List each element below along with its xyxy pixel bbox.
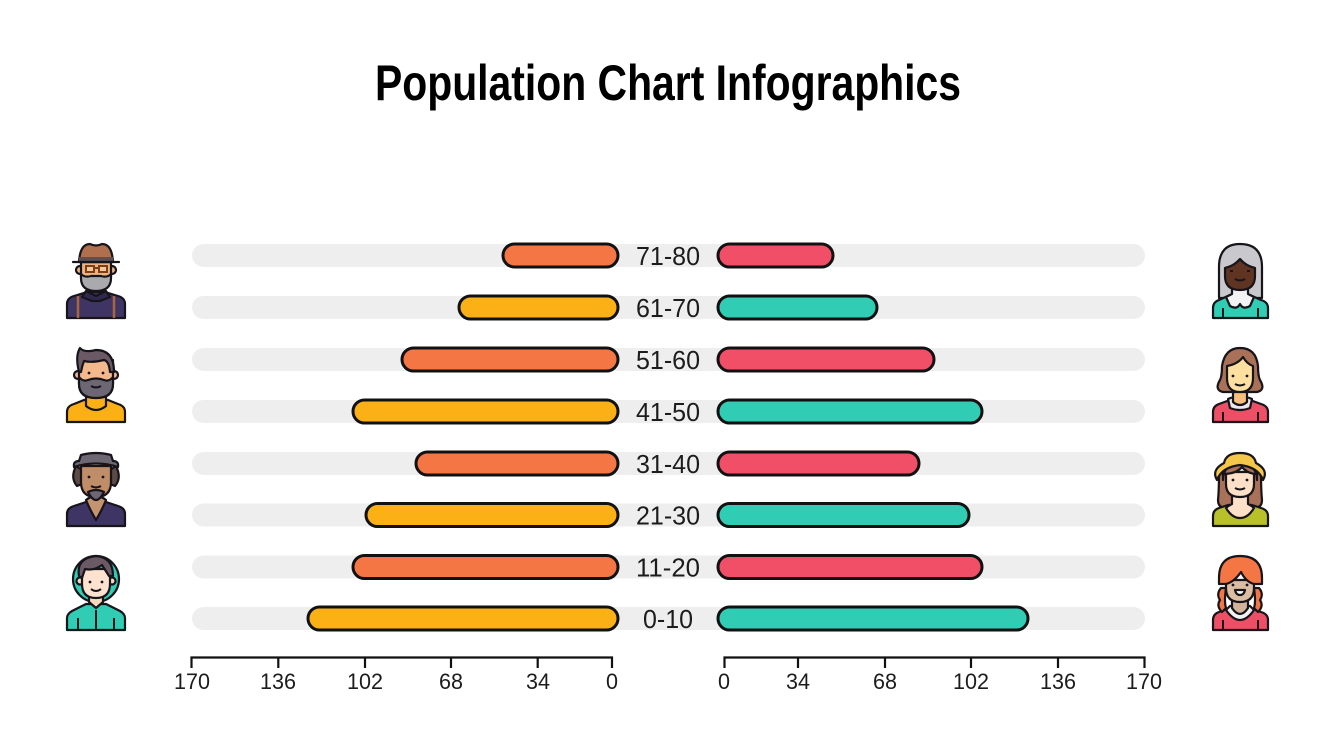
row 61-70: 61-70 bbox=[636, 293, 700, 323]
row 11-20: 11-20 bbox=[636, 552, 700, 582]
right axis: 34 bbox=[786, 669, 810, 694]
row 21-30 bbox=[192, 500, 1145, 530]
title: Population Chart Infographics bbox=[375, 55, 961, 111]
row 0-10: 0-10 bbox=[643, 604, 693, 634]
row 71-80 bbox=[192, 241, 1145, 271]
icon: woman with gray hair bbox=[1213, 244, 1268, 318]
left axis bbox=[174, 658, 618, 694]
icon: boy in green hoodie bbox=[67, 556, 125, 630]
icon: woman with straw hat bbox=[1213, 453, 1268, 526]
icon: man with beard and yellow sweater bbox=[67, 348, 125, 422]
right axis: 68 bbox=[873, 669, 897, 694]
icon: girl with red braids bbox=[1213, 556, 1268, 630]
row 0-10 bbox=[192, 604, 1145, 634]
right axis bbox=[718, 658, 1162, 694]
row 31-40: 31-40 bbox=[636, 449, 700, 479]
right axis: 170 bbox=[1126, 669, 1162, 694]
icon: old man with hat and glasses bbox=[67, 244, 125, 318]
left axis: 170 bbox=[174, 669, 210, 694]
left axis: 68 bbox=[439, 669, 463, 694]
row 41-50: 41-50 bbox=[636, 397, 700, 427]
icon: woman with brown hair bbox=[1213, 348, 1268, 422]
right axis: 0 bbox=[718, 669, 730, 694]
left axis: 136 bbox=[260, 669, 296, 694]
right axis: 136 bbox=[1040, 669, 1076, 694]
left axis: 102 bbox=[347, 669, 383, 694]
row 71-80: 71-80 bbox=[636, 241, 700, 271]
row 31-40 bbox=[192, 449, 1145, 479]
row 11-20 bbox=[192, 552, 1145, 582]
left axis: 34 bbox=[526, 669, 550, 694]
chart: population pyramid bbox=[192, 241, 1145, 634]
row 51-60: 51-60 bbox=[636, 345, 700, 375]
row 21-30: 21-30 bbox=[636, 500, 700, 530]
row 41-50 bbox=[192, 397, 1145, 427]
left axis: 0 bbox=[606, 669, 618, 694]
right axis: 102 bbox=[953, 669, 989, 694]
icon: man with bucket hat bbox=[67, 453, 125, 526]
row 61-70 bbox=[192, 293, 1145, 323]
row 51-60 bbox=[192, 345, 1145, 375]
